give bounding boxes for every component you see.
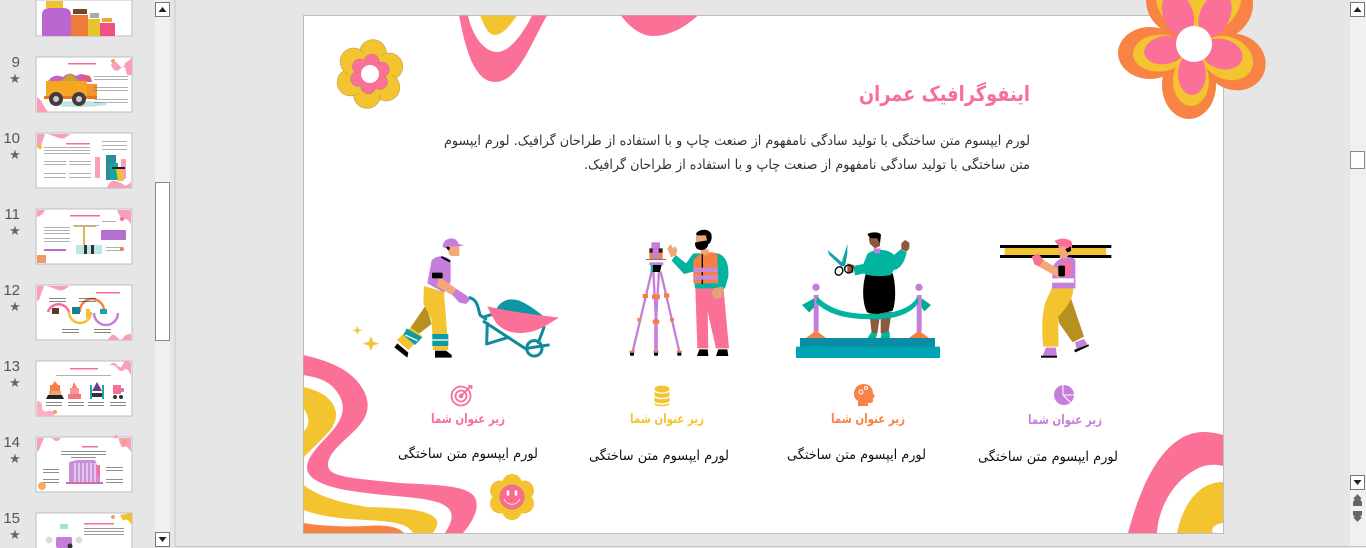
subtitle: زیر عنوان شما [831, 412, 905, 427]
column 2: database [589, 386, 729, 464]
star marker: ★ [9, 224, 21, 239]
icon: target [452, 386, 472, 406]
illustration: worker carrying beam [1000, 239, 1111, 358]
intro text block [444, 132, 1030, 173]
column 1: target [398, 386, 538, 462]
worker [1032, 239, 1089, 358]
beam [1000, 245, 1111, 258]
platform steps [796, 338, 940, 358]
slide number 13: 13 [3, 358, 20, 375]
wheelbarrow [470, 298, 559, 356]
star marker: ★ [9, 452, 21, 467]
decorative wave: top pink arc [621, 16, 698, 36]
slide number 9: 9 [12, 54, 20, 71]
subtitle: زیر عنوان شما [1028, 413, 1102, 428]
description: لورم ایپسوم متن ساختگی [787, 446, 926, 463]
icon: head with gears [854, 384, 875, 406]
icon: database [654, 386, 670, 406]
woman [847, 232, 909, 338]
subtitle: زیر عنوان شما [431, 412, 505, 427]
slide number 14: 14 [3, 434, 20, 451]
worker [394, 238, 470, 358]
slide thumbnail 14 [36, 435, 132, 492]
slide thumbnail 15 (partial) [36, 513, 132, 548]
slide number 12: 12 [3, 282, 20, 299]
slide thumbnail 9 [36, 57, 132, 112]
slide thumbnail 11 [36, 209, 132, 264]
icon: large orange flower [1118, 0, 1274, 119]
slide thumbnail 10 [36, 133, 132, 188]
star marker: ★ [9, 148, 21, 163]
slide number 11: 11 [4, 206, 20, 223]
ribbon [816, 297, 919, 319]
scissors [828, 244, 853, 277]
right scrollbar [1350, 0, 1366, 546]
slide number 10: 10 [3, 130, 20, 147]
tripod [629, 242, 682, 356]
star marker: ★ [9, 300, 21, 315]
panel: main slide [304, 0, 1274, 533]
illustration: ribbon cutting [796, 232, 940, 358]
intro text block: لورم ایپسوم متن ساختگی با تولید سادگی نامفهوم از صنعت چاپ و با استفاده از طراحان گرافیک. لورم ایپسوم [444, 132, 1030, 149]
slide number 15: 15 [3, 510, 20, 527]
slide thumbnail 8 (partial) [36, 0, 132, 36]
title: اینفوگرافیک عمران [859, 81, 1030, 106]
illustration: worker with wheelbarrow [352, 238, 559, 358]
description: لورم ایپسوم متن ساختگی [398, 445, 538, 462]
decorative wave: bottom-right rainbow [1128, 432, 1223, 533]
column 4: pie chart [978, 384, 1118, 465]
star marker: ★ [9, 376, 21, 391]
decorative wave: bottom-left swirl [304, 355, 477, 533]
description: لورم ایپسوم متن ساختگی [978, 448, 1118, 465]
illustration: surveyor with tripod [629, 230, 729, 356]
star marker: ★ [9, 528, 21, 543]
intro text block: متن ساختگی با تولید سادگی نامفهوم از صنعت چاپ و با استفاده از طراحان گرافیک. [584, 156, 1030, 173]
sparkles [352, 326, 379, 351]
column 3: head with gears [787, 384, 926, 463]
decorative wave: top pink loop [459, 16, 547, 82]
subtitle: زیر عنوان شما [630, 412, 704, 427]
left scrollbar [155, 0, 170, 546]
slide thumbnail 12 [36, 285, 132, 340]
star marker: ★ [9, 72, 21, 87]
slide thumbnail 13 [36, 361, 132, 416]
panel: slide thumbnails sidebar [3, 0, 132, 548]
icon: pie chart [1054, 384, 1075, 405]
description: لورم ایپسوم متن ساختگی [589, 447, 729, 464]
surveyor [667, 230, 729, 356]
icon: small yellow flower [334, 35, 406, 113]
rope posts [802, 284, 931, 338]
icon: smiley flower [490, 474, 534, 520]
